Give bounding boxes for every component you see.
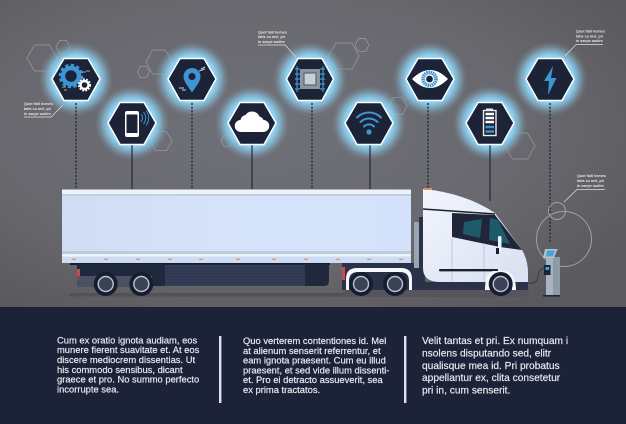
bottom panel: [0, 307, 626, 424]
callout: lightning bolt: [565, 30, 605, 56]
text block: middle: ex prima tractatos.: [243, 384, 320, 395]
icon: battery: [466, 102, 514, 144]
callout: charger: [564, 174, 606, 202]
callout: charger: tatis cu mel, pri: [577, 179, 604, 183]
text block: middle: Quo verterem contentiones id. Mel: [243, 335, 386, 346]
callout: gears: Quot falli homes: [24, 102, 53, 106]
divider: [404, 336, 406, 403]
callout: microchip: tatis cu mel, pri: [258, 35, 285, 39]
callout: charger: in saepe audire: [577, 184, 604, 188]
text block: middle: at alienum senserit referrentur, et: [243, 345, 381, 356]
ground shadow: [69, 293, 529, 296]
callout: microchip: [258, 30, 296, 57]
text block: middle: et. Pro ei detracto assueverit, sea: [243, 374, 383, 385]
callout: lightning bolt: tatis cu mel, pri: [576, 34, 603, 38]
icon: lightning bolt: [526, 58, 574, 100]
decorative outline hexagons: [27, 38, 535, 159]
tractor chassis: [342, 217, 528, 290]
text block: right: pri in, cum senserit.: [422, 386, 510, 396]
icon: eye: [406, 58, 454, 100]
callout: microchip: in saepe audire: [258, 40, 285, 44]
text block: middle: [243, 335, 389, 395]
text block: middle: praesent, et sed vide illum dissenti-: [243, 364, 389, 375]
charging station: [528, 249, 560, 297]
icon: cloud: [228, 102, 276, 144]
text block: right: appellantur ex, clita consetetur: [422, 373, 561, 384]
callout: lightning bolt: Quot falli homes: [576, 30, 605, 34]
front wheel: [489, 272, 513, 296]
text block: middle: eam ignota praesent. Cum eu illud: [243, 355, 386, 366]
trailer box: [62, 190, 411, 263]
charger outline circles: [536, 202, 592, 266]
text block: left: [57, 334, 200, 394]
tractor wheels: [349, 272, 407, 296]
icon: smartphone with signal: [108, 102, 156, 144]
connector lines: [76, 103, 550, 243]
tractor fender: [346, 268, 412, 290]
text block: right: qualisque mea id. Pri probatus: [422, 361, 560, 372]
icon: wifi: [345, 102, 393, 144]
text block: left: incorrupte sea.: [57, 383, 119, 394]
blue glows behind hexagons: [38, 41, 588, 161]
callout: gears: in saepe audire: [24, 112, 51, 116]
icon: microchip: [286, 58, 334, 100]
truck: [62, 189, 528, 296]
divider: [219, 336, 221, 403]
text block: right: Velit tantas et pri. Ex numquam i: [422, 336, 568, 347]
text block: left: munere fierent suavitate et. At eos: [57, 344, 200, 355]
callout: lightning bolt: in saepe audire: [576, 39, 603, 43]
text block: right: nsolens disputando sed, elitr: [422, 348, 552, 360]
icon: location pin: [168, 58, 216, 100]
icon: gears: [52, 58, 100, 100]
callout: gears: [24, 102, 63, 117]
callout: charger: Quot falli homes: [577, 174, 606, 178]
text block: left: discere mediocrem dissentias. Ut: [57, 354, 195, 365]
callout: gears: tatis cu mel, pri: [24, 107, 51, 111]
text block: left: graece et pro. No summo perfecto: [57, 374, 199, 385]
cab: [423, 189, 528, 290]
text block: left: his commodo sensibus, dicant: [57, 364, 183, 375]
trailer rear wheels: [94, 272, 153, 296]
text block: left: Cum ex oratio ignota audiam, eos: [57, 334, 197, 345]
callout: microchip: Quot falli homes: [258, 30, 287, 34]
trailer undercarriage: [70, 263, 330, 287]
background: [0, 0, 626, 307]
text block: right: [422, 336, 568, 396]
